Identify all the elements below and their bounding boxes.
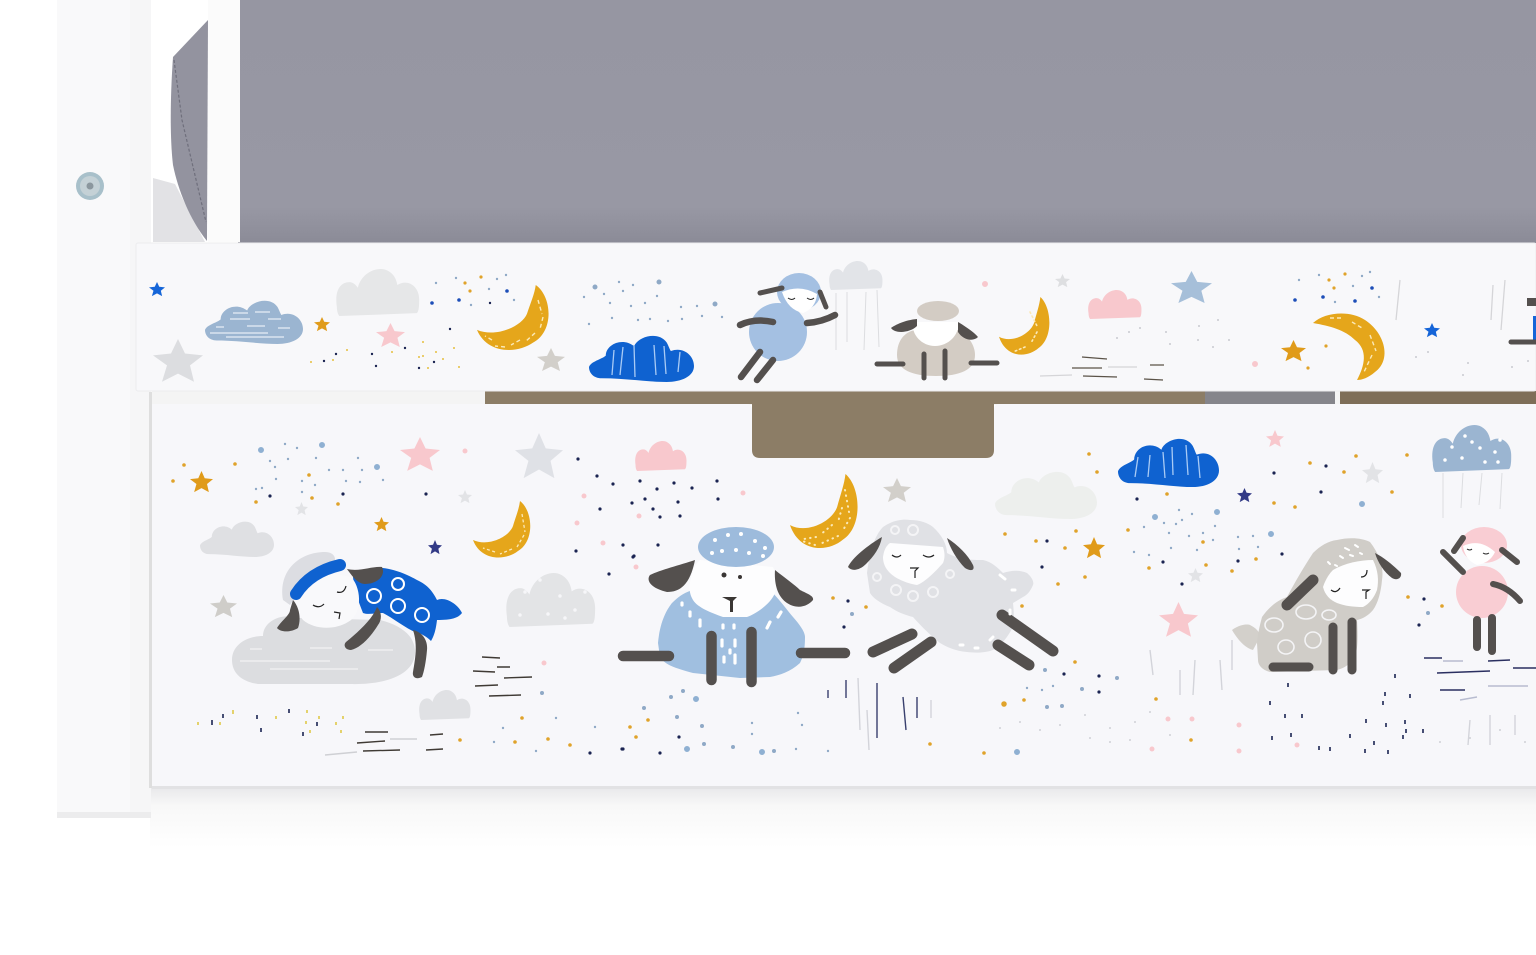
sheep: sleeping on cloud (blue pyjamas) [277, 552, 462, 678]
sheep: cut-off at right edge [1511, 298, 1536, 342]
drawer stars [190, 430, 1383, 637]
screw [76, 172, 104, 200]
sheep: sitting blue [623, 527, 845, 682]
panel: drawer front [152, 393, 1536, 788]
slat behind post [153, 178, 205, 242]
rail stars [149, 271, 1440, 382]
drawer clouds [200, 425, 1511, 720]
rail clouds [205, 261, 1141, 382]
drawer moons [473, 474, 858, 557]
drawer short dashes [198, 674, 1423, 754]
drawer handle cut-out [752, 393, 994, 458]
mattress side [171, 20, 208, 241]
mattress with grey sheet [238, 0, 1536, 243]
grey hazy speckle [1000, 712, 1525, 742]
panel: top rail [136, 243, 1536, 391]
rain from small rail cloud [836, 290, 879, 350]
rail dots [311, 272, 1528, 375]
rail grass strokes [1040, 280, 1505, 380]
sheep: small pink [1443, 527, 1520, 651]
cloud under sleeping sheep [232, 616, 415, 684]
sheep: sitting beige large [1232, 538, 1401, 672]
sheep: jumping blue [740, 273, 835, 380]
sheep: sitting beige [877, 301, 997, 378]
floor shadow [150, 788, 1536, 848]
rail moons [477, 285, 1385, 380]
bed frame upright [208, 0, 240, 242]
gap under rail [152, 391, 1536, 405]
drawer dots [173, 444, 1442, 753]
sheep: leaping grey [848, 520, 1053, 668]
corner post [57, 0, 152, 818]
drawer bottom edge [152, 786, 1536, 789]
drawer grass strokes [325, 640, 1536, 755]
